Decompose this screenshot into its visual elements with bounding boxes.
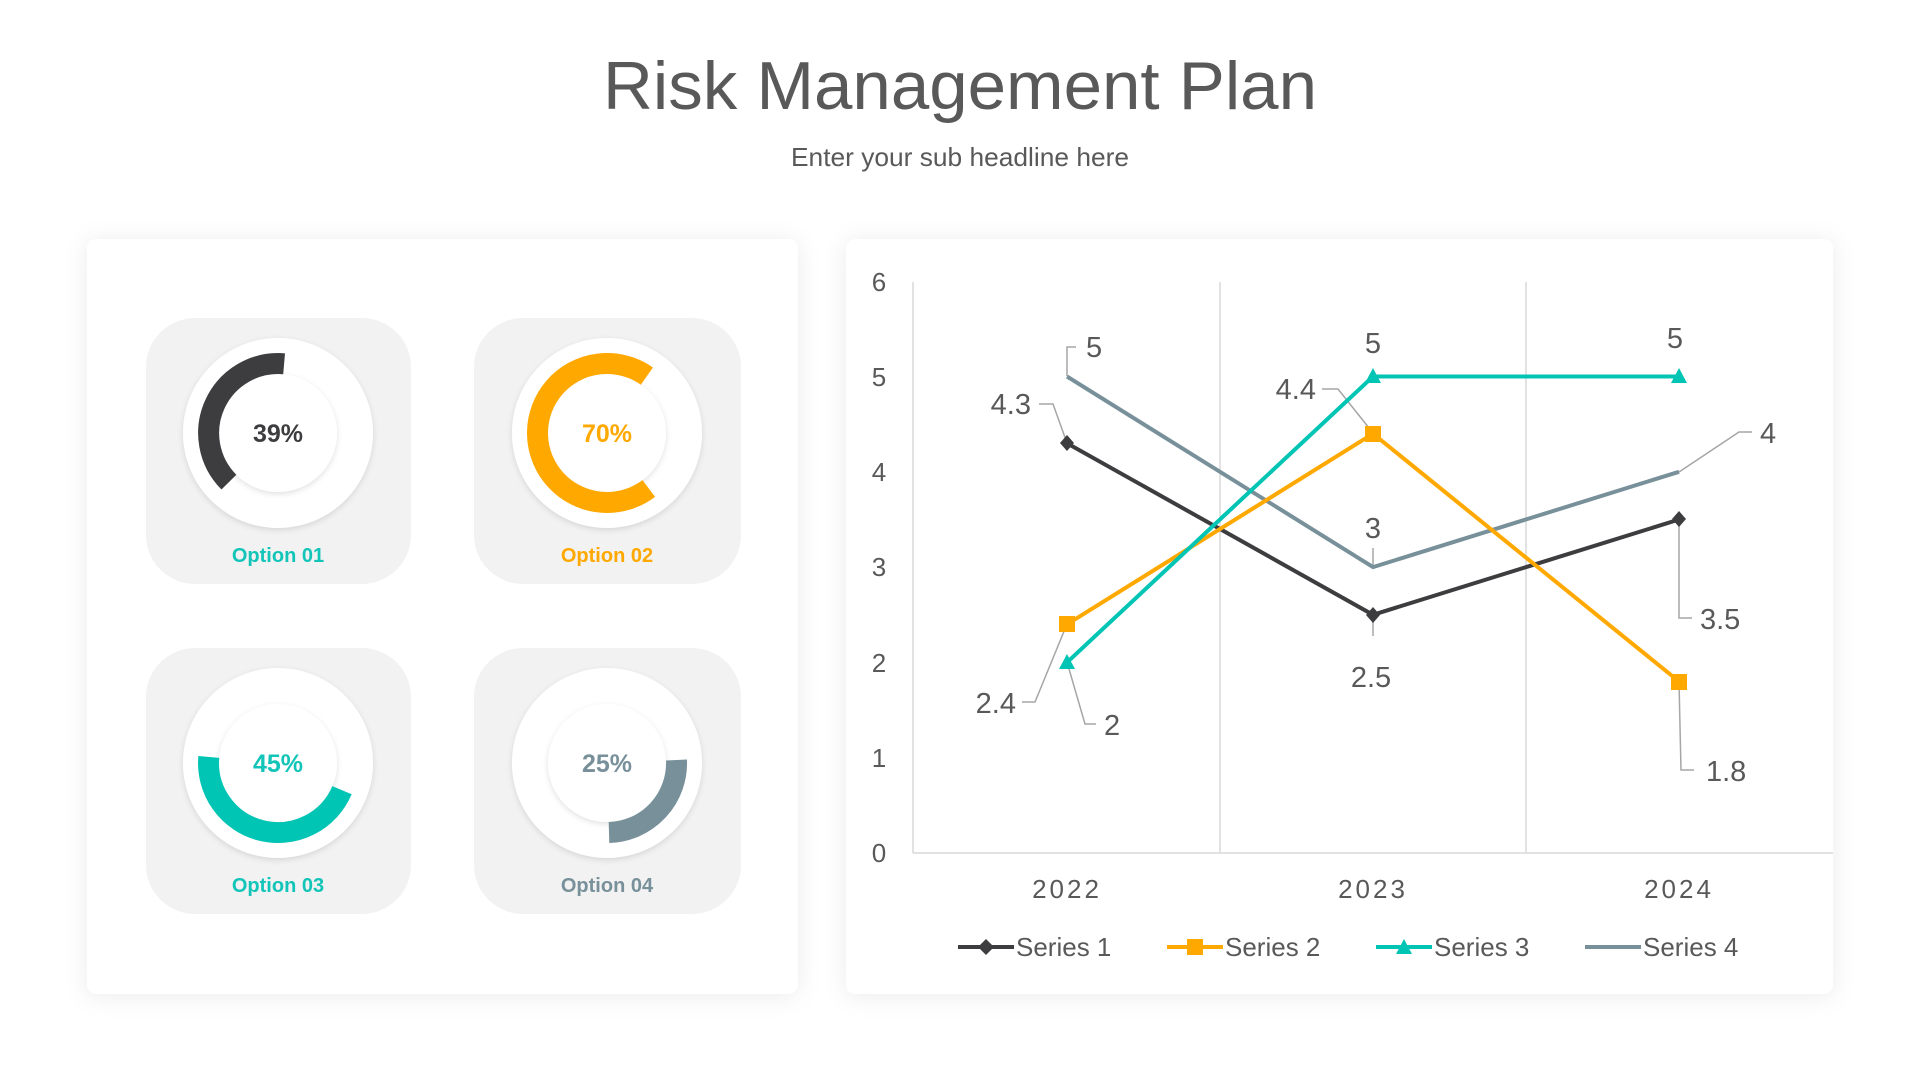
value 45%: 45%	[253, 750, 303, 778]
card: option 01	[146, 318, 411, 584]
x axis labels: 2022	[1032, 874, 1102, 904]
x axis labels: 2023	[1338, 874, 1408, 904]
series 3 line	[1059, 368, 1687, 669]
legend	[958, 932, 1738, 962]
y axis labels: 0	[872, 838, 886, 868]
y axis labels: 2	[872, 648, 886, 678]
label option 03: Option 03	[232, 875, 324, 897]
y axis labels: 6	[872, 267, 886, 297]
label option 04: Option 04	[561, 875, 654, 897]
series 4 line	[1067, 376, 1679, 567]
legend: Series 2	[1225, 932, 1320, 962]
data labels	[976, 323, 1776, 788]
y axis labels: 3	[872, 552, 886, 582]
series 1 line	[1060, 435, 1686, 623]
value 39%: 39%	[253, 420, 303, 448]
card: option 03	[146, 648, 411, 914]
data labels: 2.4	[976, 688, 1016, 720]
data labels: 5	[1365, 328, 1381, 360]
series 2 line	[1059, 426, 1687, 690]
legend: Series 1	[1016, 932, 1111, 962]
data labels: 2	[1104, 710, 1120, 742]
panel: donuts	[87, 239, 798, 994]
y axis labels	[872, 267, 886, 868]
data labels: 1.8	[1706, 756, 1746, 788]
label option 01: Option 01	[232, 545, 324, 567]
donut arc 25%	[609, 760, 677, 832]
data labels: 5	[1086, 332, 1102, 364]
data labels: 3	[1365, 513, 1381, 545]
x axis labels: 2024	[1644, 874, 1714, 904]
y axis labels: 5	[872, 362, 886, 392]
legend: Series 3	[1434, 932, 1529, 962]
donut arc 39%	[209, 364, 284, 482]
donut arc 45%	[209, 757, 342, 833]
data labels: 4	[1760, 418, 1776, 450]
leader lines	[1022, 347, 1752, 770]
donut arc 70%	[537, 363, 649, 502]
data labels: 5	[1667, 323, 1683, 355]
data labels: 4.4	[1276, 374, 1316, 406]
legend: Series 4	[1643, 932, 1738, 962]
data labels: 3.5	[1700, 604, 1740, 636]
card: option 02	[474, 318, 741, 584]
label option 02: Option 02	[561, 545, 653, 567]
card: option 04	[474, 648, 741, 914]
value 70%: 70%	[582, 420, 632, 448]
data labels: 4.3	[991, 389, 1031, 421]
x axis labels	[1032, 874, 1714, 904]
y axis labels: 4	[872, 457, 886, 487]
data labels: 2.5	[1351, 662, 1391, 694]
panel: line chart	[846, 239, 1833, 994]
title: Risk Management Plan	[603, 48, 1317, 124]
value 25%: 25%	[582, 750, 632, 778]
subtitle: Enter your sub headline here	[791, 142, 1129, 172]
y axis labels: 1	[872, 743, 886, 773]
